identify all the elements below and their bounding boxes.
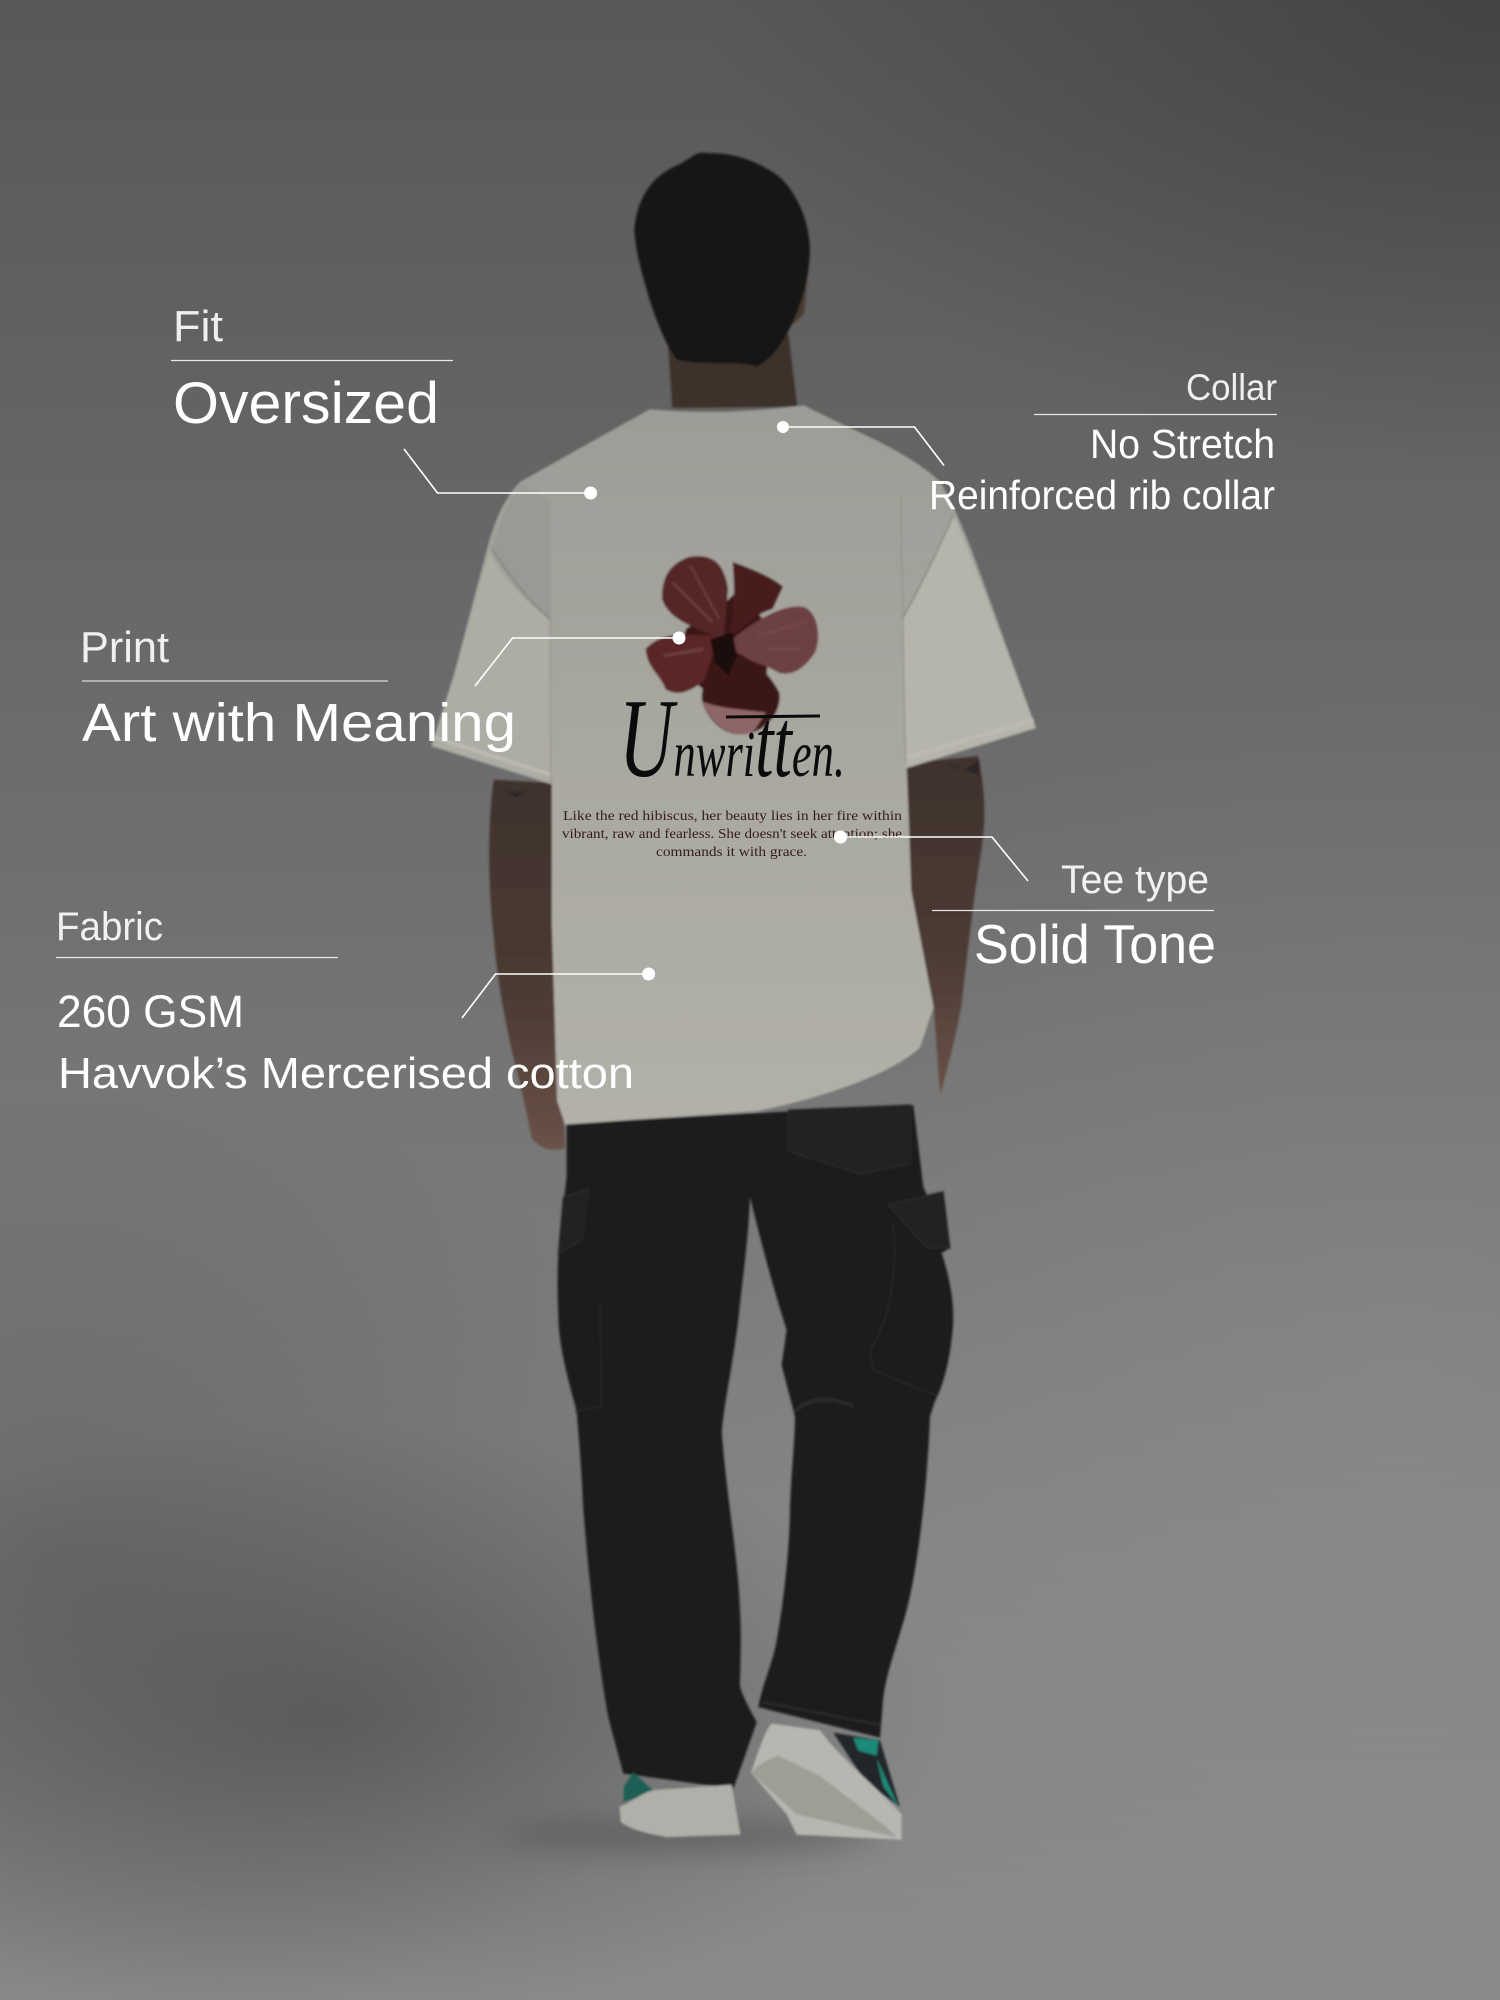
callout: print: Art with Meaning bbox=[82, 693, 516, 753]
callout: print bbox=[80, 623, 686, 753]
print caption: commands it with grace. bbox=[656, 845, 807, 860]
hibiscus print bbox=[646, 556, 818, 735]
model figure bbox=[431, 153, 1036, 1840]
callout: fit: Oversized bbox=[173, 371, 439, 436]
floor shadow bbox=[500, 1819, 880, 1851]
right shoe bbox=[751, 1723, 902, 1840]
callout: collar bbox=[777, 367, 1277, 518]
neck and hair bbox=[634, 153, 810, 408]
callout: collar: No Stretch bbox=[1090, 421, 1275, 467]
callout: collar: Collar bbox=[1186, 367, 1277, 408]
callout: fabric bbox=[56, 905, 655, 1098]
callout: fabric: 260 GSM bbox=[57, 986, 244, 1037]
arms bbox=[489, 756, 984, 1150]
t-shirt bbox=[431, 405, 1036, 1125]
left shoe bbox=[619, 1772, 741, 1837]
callout: fabric: Havvok’s Mercerised cotton bbox=[58, 1049, 634, 1098]
print script title: Unwritten. bbox=[619, 677, 845, 801]
callout: fit bbox=[171, 302, 597, 500]
print caption bbox=[562, 809, 902, 860]
callout: tee type: Solid Tone bbox=[974, 913, 1216, 975]
callout: fabric: Fabric bbox=[56, 905, 163, 949]
callout: fit: Fit bbox=[173, 302, 223, 351]
print caption: vibrant, raw and fearless. She doesn't seek attention; she bbox=[562, 827, 902, 842]
callout: collar: Reinforced rib collar bbox=[929, 472, 1275, 518]
callout: print: Print bbox=[80, 623, 169, 672]
print caption: Like the red hibiscus, her beauty lies in her fire within bbox=[563, 809, 902, 824]
callout: tee type: Tee type bbox=[1061, 858, 1209, 902]
callout: tee type bbox=[834, 830, 1216, 975]
trousers bbox=[558, 1105, 953, 1789]
